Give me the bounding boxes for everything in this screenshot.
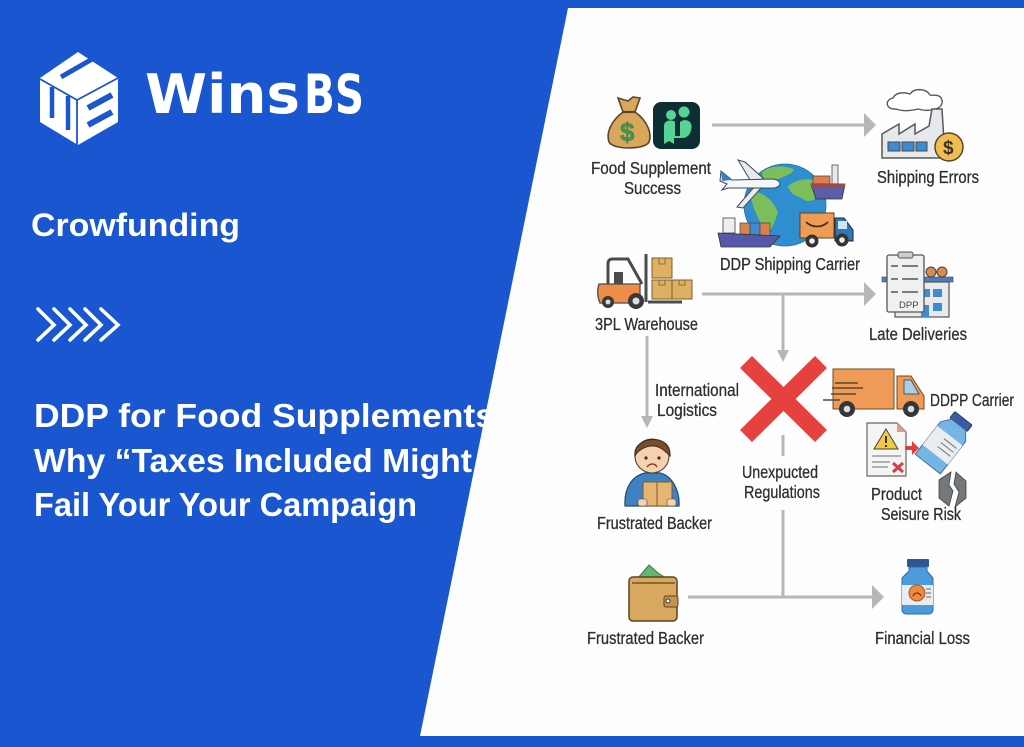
icon: money bag: $ bbox=[620, 117, 635, 147]
icon: dark app tile with people bbox=[653, 102, 700, 149]
icon: warning document bbox=[867, 423, 906, 476]
icon: globe with plane, ships and truck bbox=[718, 160, 853, 248]
icon: clipboard and building bbox=[882, 252, 953, 317]
label: product seisure risk bbox=[871, 484, 961, 524]
logo icon: WBS cube bbox=[40, 52, 118, 145]
label: late deliveries: Late Deliveries bbox=[869, 324, 967, 344]
label: 3PL warehouse: 3PL Warehouse bbox=[595, 314, 698, 334]
icon: factory with cloud and coin bbox=[882, 90, 963, 161]
label: product seisure risk: Seisure Risk bbox=[881, 504, 961, 524]
icon: clipboard and building: DPP bbox=[899, 300, 919, 311]
label: unexpucted regulations bbox=[742, 462, 820, 502]
label: food supplement success bbox=[591, 158, 711, 198]
icon: wallet with cash bbox=[629, 565, 678, 621]
main title text bbox=[34, 397, 495, 523]
label: international logistics: Logistics bbox=[657, 400, 717, 420]
label: international logistics: International bbox=[655, 380, 739, 400]
arrows and connectors bbox=[641, 113, 884, 609]
panel: white flowchart area bbox=[420, 8, 1024, 736]
label: international logistics bbox=[655, 380, 739, 420]
logo wordmark: BS bbox=[304, 63, 364, 126]
icon: broken shield bbox=[939, 472, 966, 507]
label: food supplement success: Success bbox=[624, 178, 681, 198]
icon: frustrated backer with box bbox=[625, 439, 679, 506]
icon: forklift with boxes bbox=[598, 254, 692, 309]
main title text: Why “Taxes Included Might bbox=[34, 442, 472, 479]
label: product seisure risk: Product bbox=[871, 484, 922, 504]
label: frustrated backer (top): Frustrated Backer bbox=[597, 513, 712, 533]
icon: factory with cloud and coin: $ bbox=[943, 138, 954, 159]
main title text: DDP for Food Supplements bbox=[34, 397, 495, 434]
label: shipping errors: Shipping Errors bbox=[877, 167, 979, 187]
logo wordmark bbox=[145, 63, 364, 126]
label: unexpucted regulations: Regulations bbox=[744, 482, 820, 502]
label: DDP shipping carrier: DDP Shipping Carrier bbox=[720, 254, 860, 274]
chevrons decoration bbox=[38, 309, 118, 340]
icon: orange delivery truck bbox=[823, 369, 924, 417]
label: frustrated backer (bottom): Frustrated Backer bbox=[587, 628, 704, 648]
icon: sad supplement bottle bbox=[902, 559, 933, 614]
label: financial loss: Financial Loss bbox=[875, 628, 970, 648]
label: unexpucted regulations: Unexpucted bbox=[742, 462, 818, 482]
icon: tilted bottle bbox=[915, 409, 976, 474]
icon: red X bbox=[746, 362, 821, 436]
label: food supplement success: Food Supplement bbox=[591, 158, 711, 178]
main title text: Fail Your Your Campaign bbox=[34, 486, 417, 523]
category heading: Crowfunding bbox=[31, 207, 240, 243]
logo wordmark: Wins bbox=[145, 63, 300, 126]
icon: money bag bbox=[608, 97, 650, 148]
icon: small red arrow bbox=[905, 441, 919, 455]
